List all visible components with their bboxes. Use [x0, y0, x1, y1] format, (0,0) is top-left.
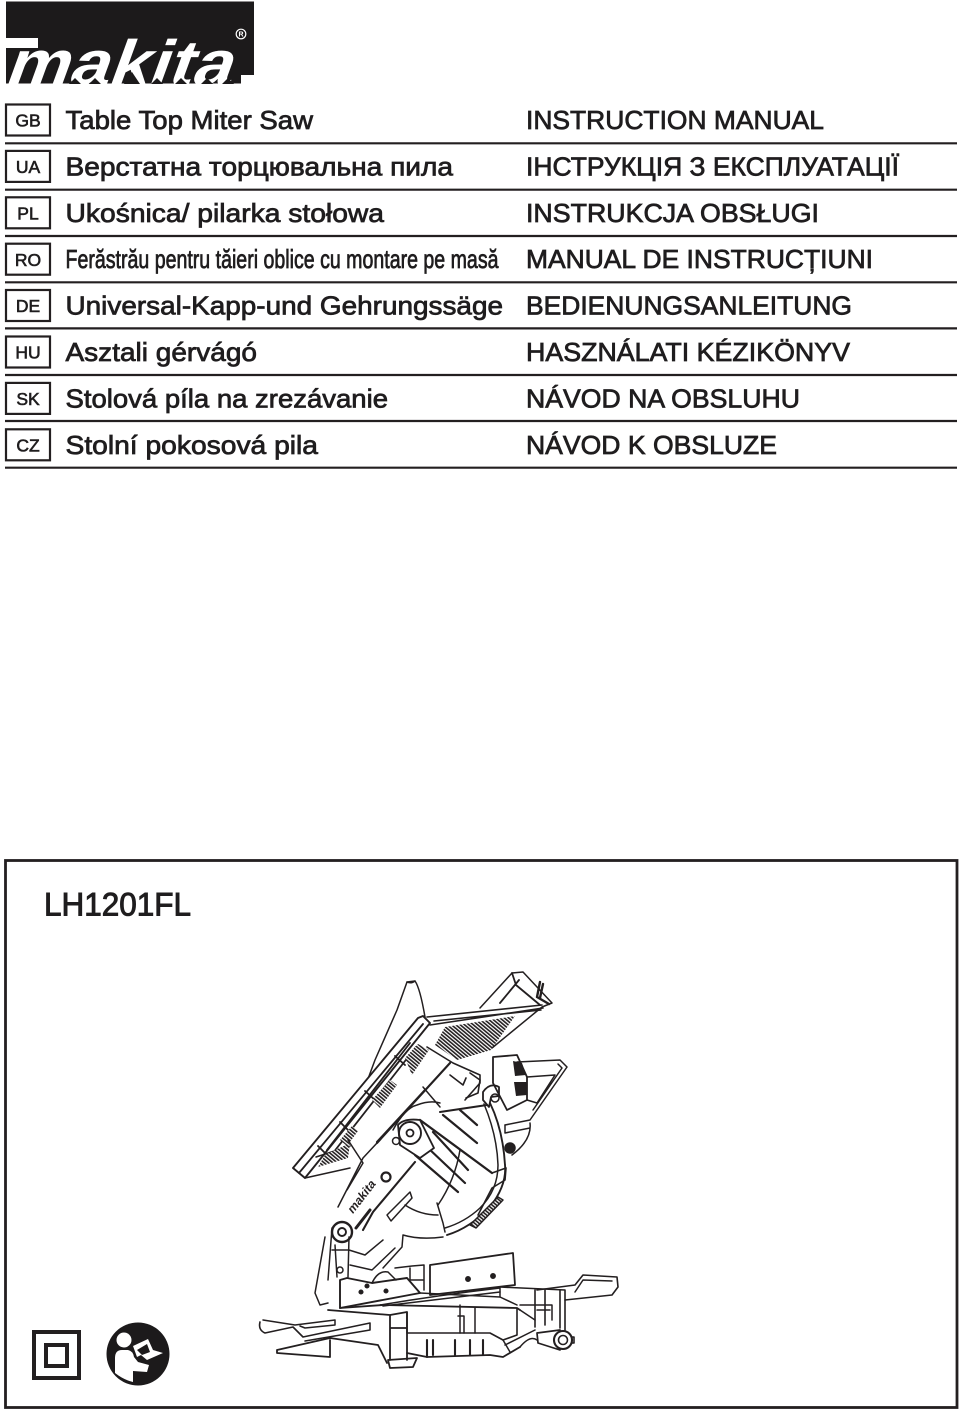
row: UA: ІНСТРУКЦІЯ З ЕКСПЛУАТАЦІЇ	[526, 151, 900, 181]
row: GB: Table Top Miter Saw	[66, 105, 313, 135]
model number: LH1201FL	[44, 887, 191, 923]
pivot post	[315, 1222, 395, 1305]
row: GB: GB	[15, 110, 41, 130]
logo: makita: R	[238, 32, 244, 38]
row: UA	[5, 151, 957, 190]
row: CZ: NÁVOD K OBSLUZE	[526, 430, 777, 460]
row: DE: Universal-Kapp-und Gehrungssäge	[66, 291, 503, 321]
row: RO: Ferăstrău pentru tăieri oblice cu montare pe masă	[66, 244, 499, 274]
row: CZ	[5, 429, 957, 468]
panel: product frame	[6, 860, 957, 1408]
row: DE: DE	[16, 296, 40, 316]
base and turntable	[340, 1288, 535, 1357]
row: RO	[5, 244, 957, 282]
row: SK: Stolová píla na zrezávanie	[66, 384, 388, 414]
row: SK: SK	[16, 389, 40, 409]
pulley	[382, 1120, 434, 1182]
logo: makita	[0, 2, 260, 100]
row: UA: UA	[16, 157, 40, 177]
row: PL: PL	[17, 203, 39, 223]
row: RO: RO	[15, 250, 41, 270]
arm with handle and makita mark: makita	[344, 1177, 379, 1216]
icon: double insulation square	[34, 1332, 79, 1378]
row: RO: MANUAL DE INSTRUCȚIUNI	[526, 244, 873, 274]
illustration: table top miter saw	[260, 972, 618, 1368]
row: PL	[5, 197, 957, 236]
base upper casting	[340, 1265, 424, 1308]
left foot and handle	[260, 1310, 417, 1368]
row: HU: HU	[15, 343, 41, 363]
row: PL: INSTRUKCJA OBSŁUGI	[526, 198, 819, 228]
row: CZ: CZ	[16, 435, 40, 455]
row: DE: BEDIENUNGSANLEITUNG	[526, 291, 852, 321]
row: GB: INSTRUCTION MANUAL	[526, 105, 824, 135]
icon: read the manual	[106, 1322, 170, 1386]
motor box and rear handle	[483, 1055, 567, 1155]
fence	[430, 1253, 515, 1295]
upper table: rails and hatched plate	[293, 972, 552, 1178]
row: GB	[5, 104, 957, 143]
row: CZ: Stolní pokosová pila	[66, 430, 319, 460]
saw head body	[338, 1047, 480, 1207]
row: HU: Asztali gérvágó	[66, 337, 257, 367]
blade guard	[405, 1103, 506, 1235]
right post, handle and knob	[500, 1275, 618, 1350]
logo: makita: makita	[0, 28, 251, 100]
row: SK: NÁVOD NA OBSLUHU	[526, 384, 800, 414]
row: PL: Ukośnica/ pilarka stołowa	[66, 198, 385, 228]
row: SK	[5, 383, 957, 421]
row: UA: Верстатна торцювальна пила	[66, 151, 454, 181]
arm with handle and makita mark	[344, 1162, 443, 1268]
row: DE	[5, 290, 957, 328]
upper table: guard fin	[365, 981, 425, 1087]
row: HU: HASZNÁLATI KÉZIKÖNYV	[526, 337, 851, 367]
row: HU	[5, 336, 957, 375]
